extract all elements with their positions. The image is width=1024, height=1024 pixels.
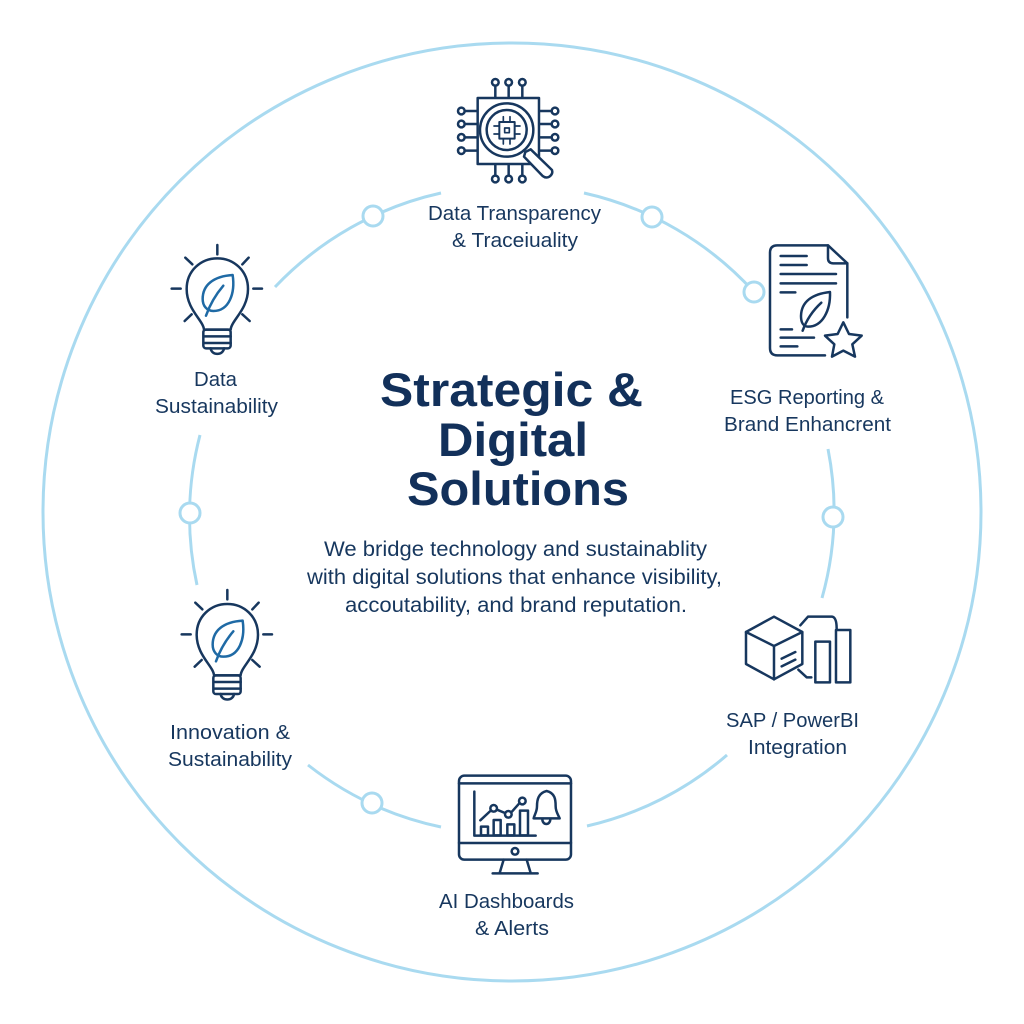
icon: light bulb with leaf (innovation) xyxy=(182,590,272,699)
label: innovation: Innovation & xyxy=(170,722,291,744)
label: SAP PowerBI: Integration xyxy=(748,737,847,759)
title: Strategic & xyxy=(380,363,643,416)
description text xyxy=(306,537,722,617)
label: ESG reporting xyxy=(724,387,891,436)
title: Solutions xyxy=(407,462,629,515)
description text: with digital solutions that enhance visibility, xyxy=(306,565,722,589)
description text: We bridge technology and sustainablity xyxy=(324,537,707,561)
label: data sustainability: Data xyxy=(194,369,238,391)
label: data transparency xyxy=(428,203,601,252)
icon: light bulb with leaf (data sustainability) xyxy=(172,245,262,354)
icon: dashboard monitor with bell xyxy=(459,776,571,873)
label: AI dashboards: AI Dashboards xyxy=(439,891,574,913)
label: SAP PowerBI xyxy=(726,710,859,759)
title xyxy=(380,363,643,515)
label: innovation: Sustainability xyxy=(168,749,292,771)
label: data sustainability: Sustainability xyxy=(155,396,278,418)
title: Digital xyxy=(438,413,588,466)
label: innovation xyxy=(168,722,292,771)
description text: accoutability, and brand reputation. xyxy=(345,593,687,617)
label: AI dashboards: & Alerts xyxy=(475,918,549,940)
icon: ESG report with leaf and star xyxy=(770,245,862,357)
label: ESG reporting: ESG Reporting & xyxy=(730,387,885,409)
label: data sustainability xyxy=(155,369,278,418)
label: data transparency: & Traceiuality xyxy=(452,230,578,252)
label: SAP PowerBI: SAP / PowerBI xyxy=(726,710,859,732)
label: AI dashboards xyxy=(439,891,574,940)
icon: cube with bar chart xyxy=(746,617,850,682)
label: ESG reporting: Brand Enhancrent xyxy=(724,414,891,436)
inner ring with connector nodes xyxy=(180,193,843,827)
label: data transparency: Data Transparency xyxy=(428,203,601,225)
icon: chip with magnifying glass xyxy=(458,79,558,182)
